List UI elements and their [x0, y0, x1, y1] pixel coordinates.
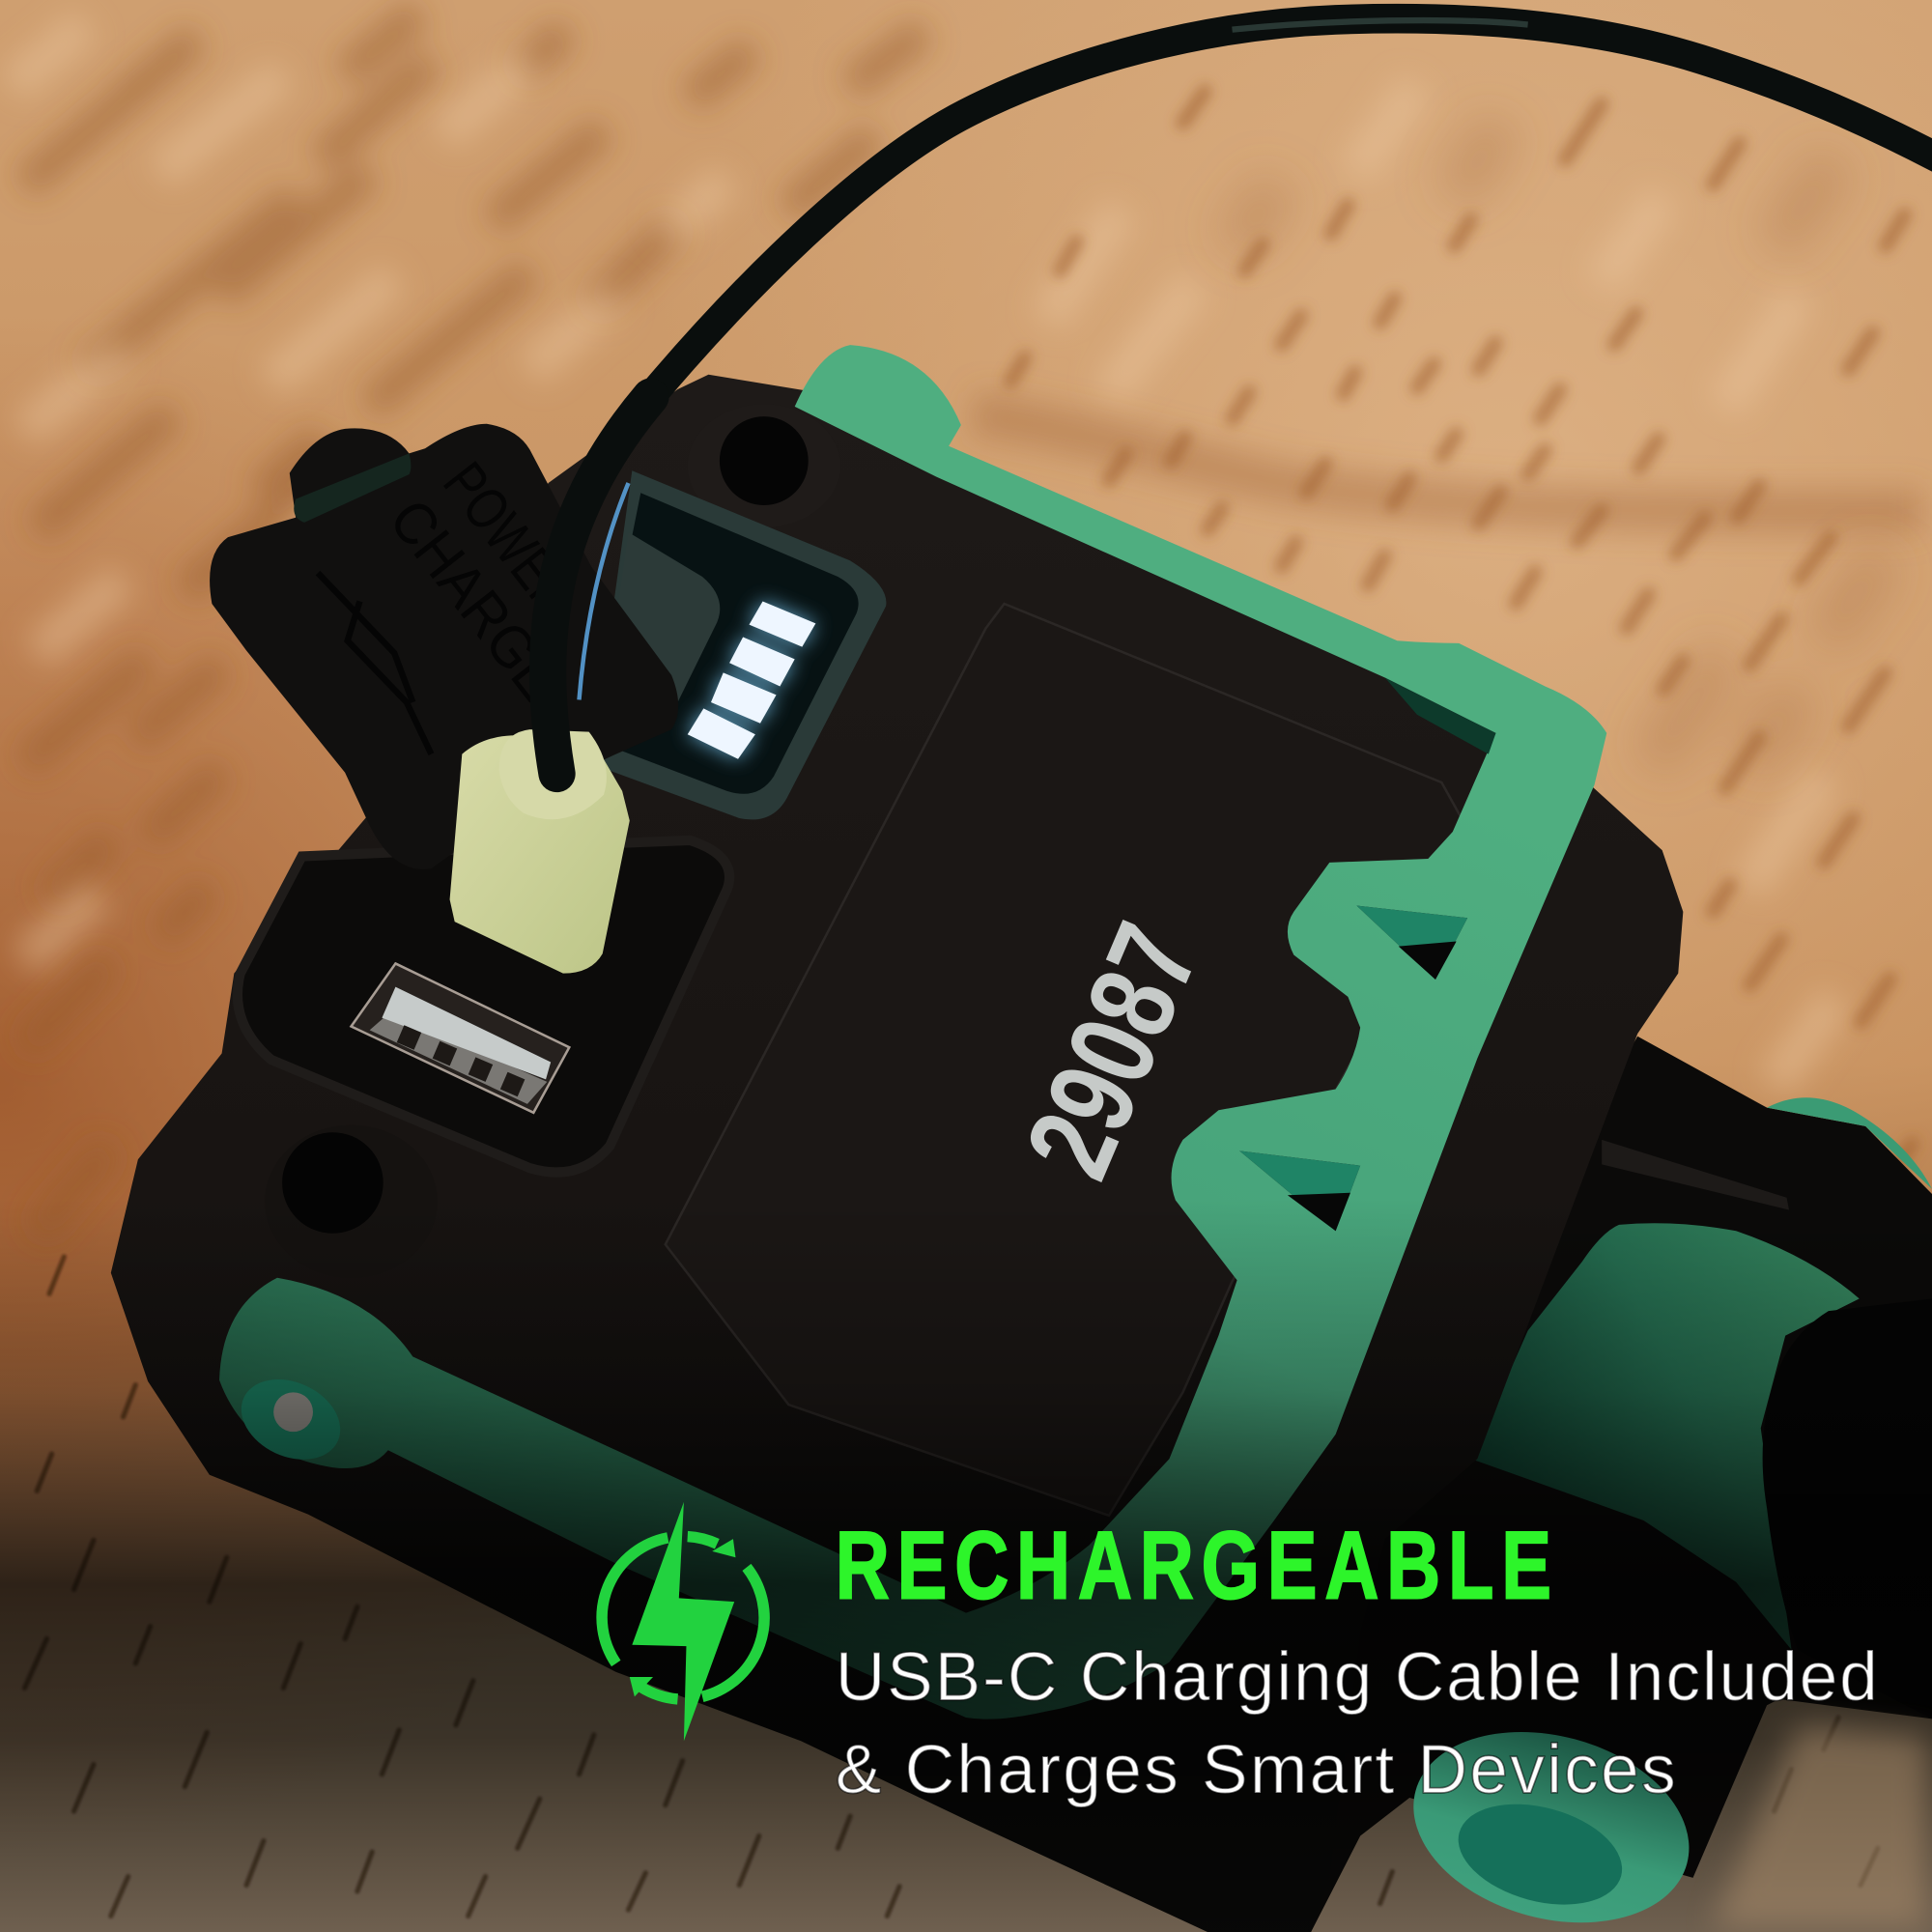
bottom right wood highlight	[1713, 1725, 1927, 1927]
rubber port flap: POWER	[431, 450, 589, 627]
device body	[111, 375, 1683, 1932]
lamp mount at lower right	[1282, 1037, 1932, 1932]
rubber port flap	[210, 424, 678, 869]
green rubber frame	[219, 345, 1606, 1719]
green headband mount	[1471, 1223, 1860, 1650]
heading: RECHARGEABLE	[836, 1511, 1551, 1619]
black charging cable	[548, 18, 1932, 774]
blue light rim	[579, 483, 629, 699]
mounting hole lower	[265, 1125, 438, 1278]
mounting hole upper	[688, 404, 840, 527]
serial number 29087: 29087	[1001, 906, 1225, 1196]
flap tab	[294, 453, 411, 523]
lower right green ring	[1392, 1703, 1711, 1932]
icon: charging bolt with circular arrows	[602, 1502, 764, 1741]
LED battery indicator	[591, 470, 886, 819]
description text	[836, 1638, 1878, 1808]
description text: & Charges Smart Devices	[836, 1731, 1676, 1808]
USB port panel	[238, 840, 729, 1173]
rubber port flap: CHARGE	[377, 487, 573, 712]
black headband knob	[1763, 1298, 1932, 1719]
USB-A port	[352, 963, 569, 1113]
USB-C plug	[450, 729, 630, 974]
description text: USB-C Charging Cable Included	[836, 1638, 1878, 1716]
recessed top panel	[666, 604, 1472, 1516]
